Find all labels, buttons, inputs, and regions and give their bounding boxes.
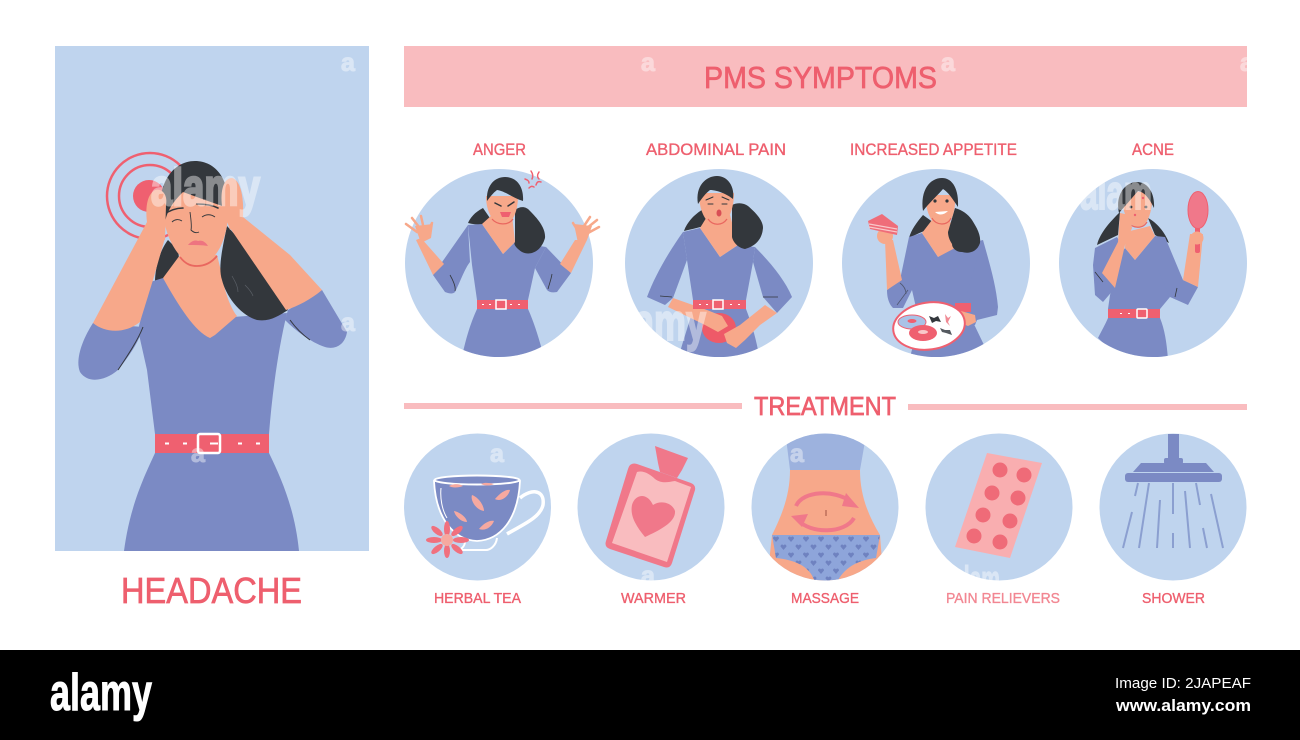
heading: headache: HEADACHE	[121, 570, 302, 611]
watermarks: a	[641, 49, 656, 77]
watermarks: a	[490, 440, 505, 468]
label: massage: MASSAGE	[791, 590, 859, 607]
image id: Image ID: 2JAPEAF	[1115, 675, 1251, 692]
symptom: abdominal pain: ABDOMINAL PAIN	[646, 140, 786, 159]
banner: PMS symptoms	[404, 46, 1247, 107]
belt	[1108, 309, 1160, 318]
icon: hot water bottle	[606, 446, 695, 568]
label: warmer: WARMER	[621, 590, 686, 607]
footer bar	[0, 650, 1300, 740]
belt	[155, 434, 269, 453]
icon: plate of sweets	[890, 298, 968, 354]
label: shower: SHOWER	[1142, 590, 1205, 607]
icon: anger mark	[525, 171, 541, 188]
url: www.alamy.com	[1115, 696, 1251, 715]
treatment: shower	[1100, 434, 1246, 580]
heading: treatment	[404, 391, 1247, 421]
symptom: acne: ACNE	[1132, 140, 1174, 159]
watermarks: alam	[952, 560, 1000, 598]
icon: blister pack	[955, 453, 1042, 558]
panel: headache	[55, 46, 369, 551]
banner: PMS symptoms: PMS SYMPTOMS	[704, 60, 937, 95]
watermarks: a	[341, 309, 356, 337]
treatment: massage	[752, 434, 898, 580]
icon: cake	[868, 214, 898, 235]
symptom: increased appetite: INCREASED APPETITE	[850, 140, 1017, 159]
label: herbal tea: HERBAL TEA	[434, 590, 521, 607]
heading: treatment: TREATMENT	[754, 391, 896, 421]
icon: flower	[426, 521, 469, 558]
watermarks: a	[1240, 49, 1255, 77]
icon: shower head	[1125, 434, 1222, 482]
symptom: acne	[1059, 140, 1247, 360]
watermarks: alamy	[151, 159, 260, 217]
symptom: increased appetite	[842, 140, 1030, 360]
belt	[477, 300, 528, 309]
icon: cup	[434, 476, 543, 550]
watermarks: alam	[1080, 167, 1152, 220]
icon: hand mirror	[1188, 192, 1208, 253]
watermarks: a	[790, 440, 805, 468]
logo: alamy: alamy	[50, 664, 152, 722]
figure: woman with headache	[78, 161, 347, 551]
watermarks	[151, 49, 1255, 598]
symptom: anger	[405, 140, 599, 358]
watermarks: a	[641, 562, 656, 590]
belt	[693, 300, 746, 309]
symptom: abdominal pain	[625, 140, 813, 358]
watermarks: a	[941, 49, 956, 77]
watermarks: a	[191, 440, 206, 468]
icon: massage arrows	[791, 493, 859, 530]
treatment: herbal tea	[404, 434, 551, 580]
treatment: pain relievers	[926, 434, 1072, 580]
watermarks: a	[341, 49, 356, 77]
treatment: warmer	[578, 434, 724, 580]
icon: pain target rings	[107, 153, 193, 239]
watermarks: amy	[634, 294, 706, 352]
symptom: anger: ANGER	[473, 140, 526, 159]
label: pain relievers: PAIN RELIEVERS	[946, 590, 1060, 607]
icon: water streams	[1123, 483, 1223, 548]
